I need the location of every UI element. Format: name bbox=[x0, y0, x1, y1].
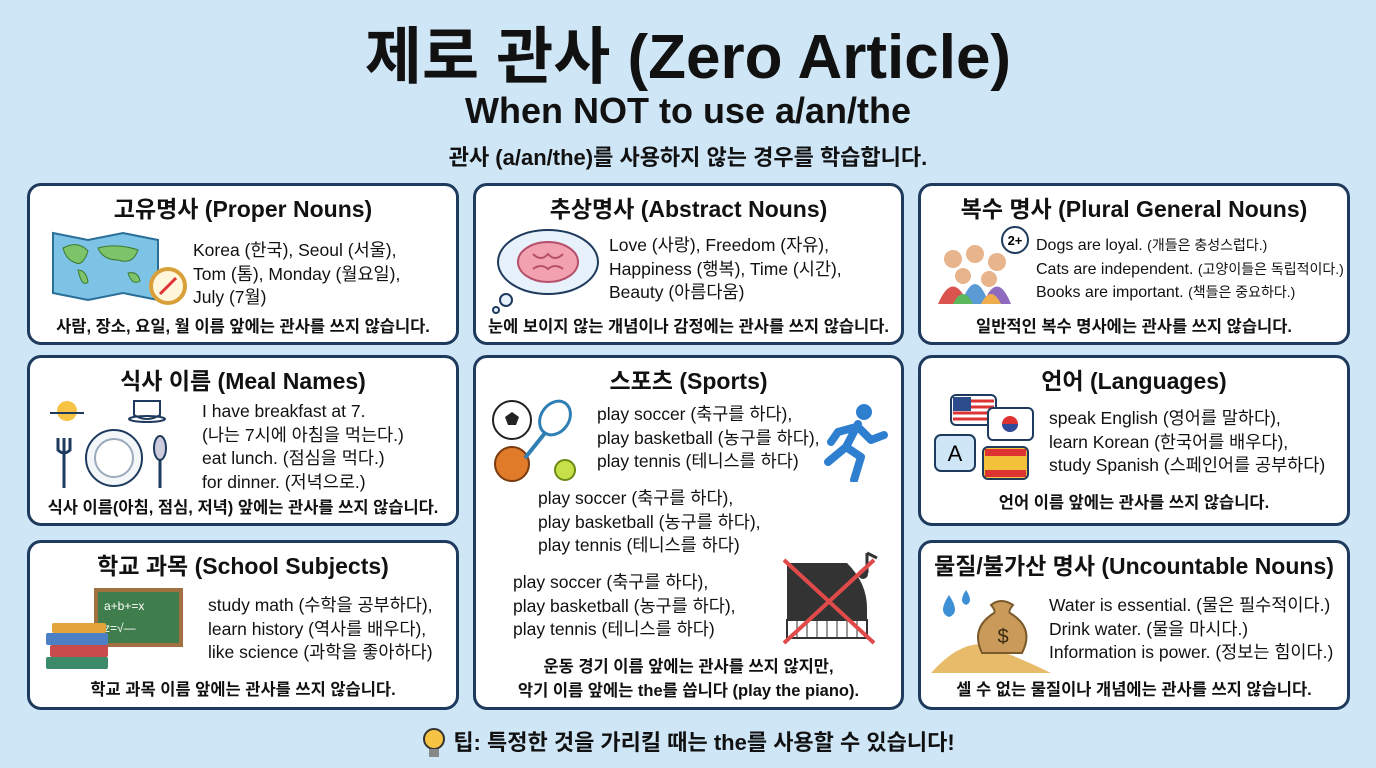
panel: school subjects: 학교 과목 (School Subjects) bbox=[97, 553, 389, 579]
examples 3: play tennis (테니스를 하다) bbox=[513, 619, 715, 639]
panel: school subjects bbox=[27, 540, 459, 710]
examples: I have breakfast at 7. bbox=[202, 401, 365, 421]
rule: 운동 경기 이름 앞에는 관사를 쓰지 않지만, bbox=[543, 658, 834, 676]
title: 제로 관사 (Zero Article) bbox=[365, 23, 1011, 92]
icon: water drops, money bag, sand bbox=[931, 590, 1051, 673]
rule: 악기 이름 앞에는 the를 씁니다 (play the piano). bbox=[518, 682, 859, 700]
icon: runner bbox=[824, 404, 888, 482]
icon: thought bubble brain bbox=[492, 229, 599, 314]
examples 3: play soccer (축구를 하다), bbox=[513, 572, 708, 592]
panel: proper nouns bbox=[27, 183, 459, 345]
examples: like science (과학을 좋아하다) bbox=[208, 642, 433, 662]
examples: Korea (한국), Seoul (서울), bbox=[193, 240, 396, 260]
examples: Water is essential. (물은 필수적이다.) bbox=[1049, 595, 1330, 615]
rule: 눈에 보이지 않는 개념이나 감정에는 관사를 쓰지 않습니다. bbox=[488, 318, 889, 336]
icon: plate, cutlery, sun, cup bbox=[50, 400, 167, 488]
examples 3 bbox=[513, 572, 736, 639]
examples: Drink water. (물을 마시다.) bbox=[1049, 618, 1248, 638]
examples bbox=[193, 240, 400, 307]
icon: water drops, money bag, sand: $ bbox=[997, 626, 1009, 648]
icon: flags speech bubbles bbox=[934, 394, 1034, 480]
intro text: 관사 (a/an/the)를 사용하지 않는 경우를 학습합니다. bbox=[449, 145, 927, 170]
rule: 식사 이름(아침, 점심, 저녁) 앞에는 관사를 쓰지 않습니다. bbox=[48, 499, 438, 517]
icon: balls and racket bbox=[492, 400, 576, 482]
examples: Happiness (행복), Time (시간), bbox=[609, 258, 842, 278]
rule: 학교 과목 이름 앞에는 관사를 쓰지 않습니다. bbox=[90, 681, 396, 699]
examples bbox=[1049, 408, 1325, 475]
panel: uncountable nouns: 물질/불가산 명사 (Uncountable Nouns) bbox=[934, 553, 1334, 579]
examples: study math (수학을 공부하다), bbox=[208, 595, 433, 615]
panel: sports: 스포츠 (Sports) bbox=[609, 368, 768, 394]
panel: plural general nouns: 복수 명사 (Plural General Nouns) bbox=[961, 196, 1307, 222]
rule: 일반적인 복수 명사에는 관사를 쓰지 않습니다. bbox=[976, 318, 1292, 336]
examples: Tom (톰), Monday (월요일), bbox=[193, 264, 400, 284]
icon: chalkboard and books: z=√— bbox=[104, 621, 136, 635]
examples: Cats are independent. (고양이들은 독립적이다.) bbox=[1036, 260, 1344, 278]
examples 1: play soccer (축구를 하다), bbox=[597, 404, 792, 424]
icon: group of people: 2+ bbox=[1008, 233, 1023, 248]
rule: 셀 수 없는 물질이나 개념에는 관사를 쓰지 않습니다. bbox=[956, 681, 1312, 699]
rule: 사람, 장소, 요일, 월 이름 앞에는 관사를 쓰지 않습니다. bbox=[56, 318, 430, 336]
panel: meal names: 식사 이름 (Meal Names) bbox=[120, 368, 366, 394]
panel: plural general nouns bbox=[918, 183, 1350, 345]
subtitle: When NOT to use a/an/the bbox=[465, 90, 911, 131]
tip with lightbulb: 팁: 특정한 것을 가리킬 때는 the를 사용할 수 있습니다! bbox=[453, 730, 955, 755]
examples bbox=[1036, 237, 1344, 301]
icon: chalkboard and books: a+b+=x bbox=[104, 599, 144, 613]
examples: learn Korean (한국어를 배우다), bbox=[1049, 432, 1288, 452]
panel: sports bbox=[473, 355, 904, 710]
panel: languages: 언어 (Languages) bbox=[1041, 368, 1227, 394]
panel: uncountable nouns bbox=[918, 540, 1350, 710]
examples 2: play basketball (농구를 하다), bbox=[538, 512, 761, 532]
rule bbox=[518, 658, 859, 700]
examples: eat lunch. (점심을 먹다.) bbox=[202, 448, 385, 468]
icon: group of people bbox=[938, 226, 1029, 304]
examples: learn history (역사를 배우다), bbox=[208, 618, 426, 638]
examples: Information is power. (정보는 힘이다.) bbox=[1049, 642, 1333, 662]
panel: meal names bbox=[27, 355, 459, 526]
icon: map with compass bbox=[52, 232, 187, 305]
examples: study Spanish (스페인어를 공부하다) bbox=[1049, 455, 1325, 475]
examples bbox=[609, 235, 842, 302]
icon: flags speech bubbles: A bbox=[948, 441, 963, 466]
examples: Beauty (아름다움) bbox=[609, 282, 744, 302]
rule: 언어 이름 앞에는 관사를 쓰지 않습니다. bbox=[999, 494, 1269, 512]
examples 2: play soccer (축구를 하다), bbox=[538, 488, 733, 508]
examples 2: play tennis (테니스를 하다) bbox=[538, 535, 740, 555]
examples: Books are important. (책들은 중요하다.) bbox=[1036, 284, 1295, 301]
panel: languages bbox=[918, 355, 1350, 526]
icon: crossed piano bbox=[782, 552, 878, 644]
examples: (나는 7시에 아침을 먹는다.) bbox=[202, 424, 404, 444]
panel: abstract nouns: 추상명사 (Abstract Nouns) bbox=[550, 196, 827, 222]
icon: chalkboard and books bbox=[46, 588, 183, 669]
examples: speak English (영어를 말하다), bbox=[1049, 408, 1281, 428]
examples: Dogs are loyal. (개들은 충성스럽다.) bbox=[1036, 237, 1267, 254]
panel: proper nouns: 고유명사 (Proper Nouns) bbox=[114, 196, 372, 222]
examples: July (7월) bbox=[193, 287, 266, 307]
examples 1 bbox=[597, 404, 820, 471]
examples bbox=[202, 401, 404, 492]
examples: for dinner. (저녁으로.) bbox=[202, 472, 366, 492]
examples 1: play tennis (테니스를 하다) bbox=[597, 451, 799, 471]
examples 2 bbox=[538, 488, 761, 555]
examples bbox=[1049, 595, 1333, 662]
examples 1: play basketball (농구를 하다), bbox=[597, 428, 820, 448]
examples bbox=[208, 595, 433, 662]
panel: abstract nouns bbox=[473, 183, 904, 345]
examples: Love (사랑), Freedom (자유), bbox=[609, 235, 829, 255]
examples 3: play basketball (농구를 하다), bbox=[513, 596, 736, 616]
